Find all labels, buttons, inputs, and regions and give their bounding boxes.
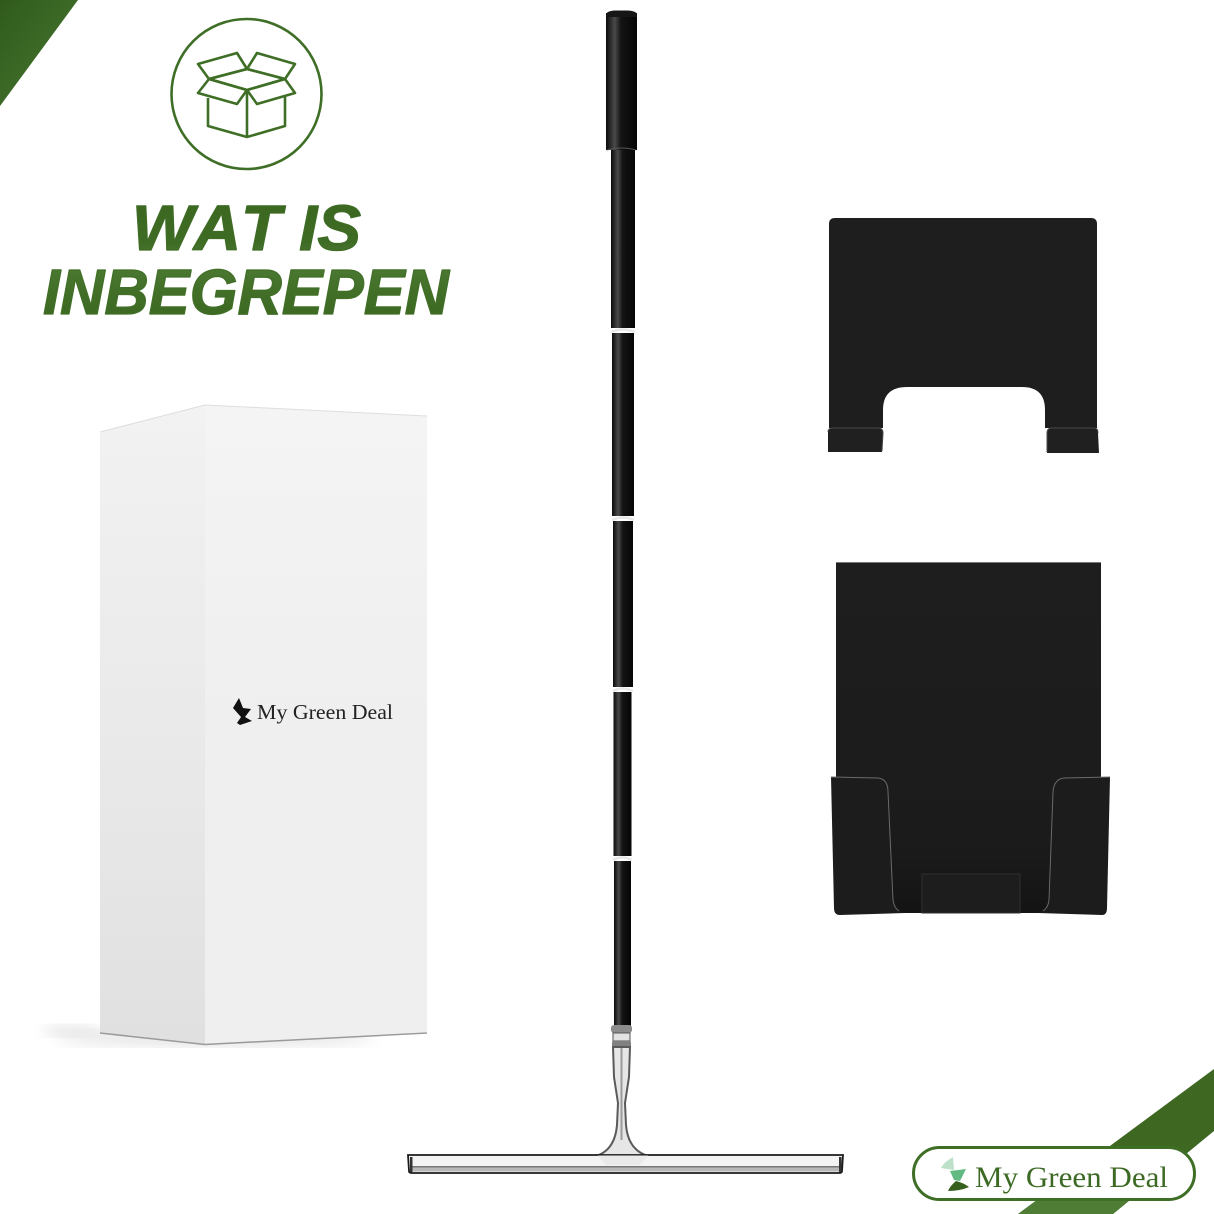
corner stripe: bottom right [1018, 1069, 1214, 1214]
badge wordmark: My Green Deal [975, 1161, 1168, 1194]
holder pocket centre [922, 874, 1020, 913]
icon: logo leaves green [941, 1157, 969, 1191]
telescopic squeegee [408, 10, 843, 1173]
product box [42, 405, 427, 1046]
icon: open box in circle [172, 19, 322, 169]
wall holder: top [828, 218, 1099, 453]
wall holder: bottom [831, 562, 1110, 915]
brand badge [914, 1148, 1194, 1200]
title line: WAT IS: WAT IS [132, 192, 361, 264]
title [43, 192, 451, 328]
box logo [233, 698, 393, 725]
corner accent: top left [0, 0, 78, 106]
icon: logo leaves black [233, 698, 252, 725]
holder arm left [831, 777, 905, 915]
holder hook left [828, 428, 883, 452]
box wordmark: My Green Deal [257, 700, 393, 724]
title line: INBEGREPEN: INBEGREPEN [43, 256, 451, 328]
squeegee blade [408, 1155, 843, 1173]
pole handle [606, 10, 637, 1026]
holder arm right [1038, 777, 1110, 915]
squeegee neck [596, 1047, 648, 1156]
pole connector [611, 1025, 632, 1047]
holder hook right [1047, 428, 1099, 453]
